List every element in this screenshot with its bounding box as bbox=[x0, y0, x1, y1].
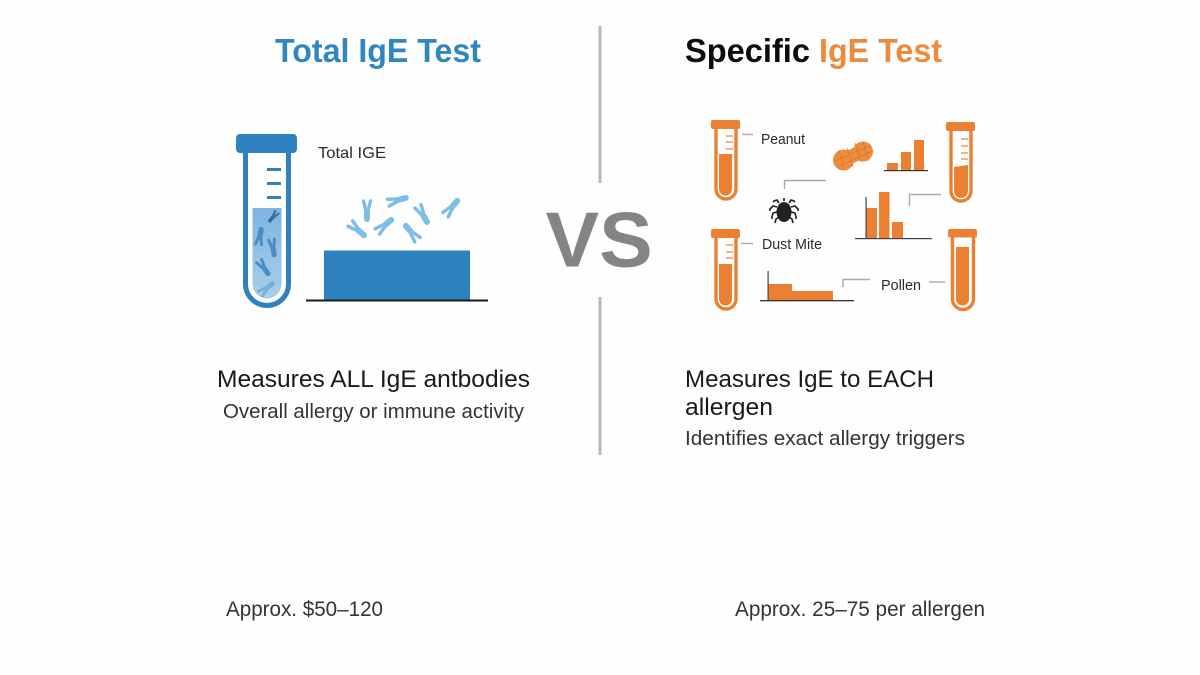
heading: Specific IgE Test bbox=[685, 32, 942, 69]
icon: tube top left bbox=[711, 120, 740, 199]
floating antibodies bbox=[348, 195, 460, 242]
label: Total IGE: Total IGE bbox=[318, 145, 386, 162]
baseline bbox=[306, 300, 488, 302]
panel: total IgE test bbox=[217, 32, 530, 621]
VS label: VS bbox=[546, 196, 653, 283]
panel: specific IgE test bbox=[685, 32, 985, 621]
divider: lower bbox=[598, 297, 602, 455]
icon: tube bottom right bbox=[948, 229, 977, 310]
icon: tube top right bbox=[946, 122, 975, 201]
label: Pollen: Pollen bbox=[881, 278, 921, 294]
blue block bbox=[324, 250, 470, 300]
icon: dust mite bbox=[770, 198, 798, 223]
icon: peanut bbox=[833, 142, 873, 170]
divider: upper bbox=[598, 26, 602, 183]
bar chart: middle bbox=[855, 192, 932, 239]
text: overall activity: Overall allergy or immune activity bbox=[223, 400, 525, 423]
text: measures each bbox=[685, 366, 934, 421]
text: measures each: Measures IgE to EACH bbox=[685, 366, 934, 393]
text: exact triggers: Identifies exact allergy triggers bbox=[685, 427, 965, 450]
antibodies in the tube bbox=[256, 211, 278, 296]
label: Peanut: Peanut bbox=[761, 132, 805, 148]
heading: Total IgE Test: Total IgE Test bbox=[275, 32, 481, 69]
heading: Specific IgE Test: Specific bbox=[685, 32, 810, 69]
icon: blue test tube bbox=[236, 134, 297, 306]
text: total cost: Approx. $50–120 bbox=[226, 598, 383, 621]
connector lines bbox=[741, 134, 945, 287]
bar chart: bottom bbox=[760, 271, 854, 301]
bar chart: peanut bbox=[884, 140, 928, 171]
text: measures all: Measures ALL IgE antbodies bbox=[217, 366, 530, 393]
text: measures each: allergen bbox=[685, 394, 773, 421]
icon: tube bottom left bbox=[711, 229, 740, 309]
label: Dust Mite: Dust Mite bbox=[762, 237, 822, 253]
heading: Specific IgE Test: IgE Test bbox=[819, 32, 942, 69]
text: specific cost: Approx. 25–75 per allergen bbox=[735, 598, 985, 621]
